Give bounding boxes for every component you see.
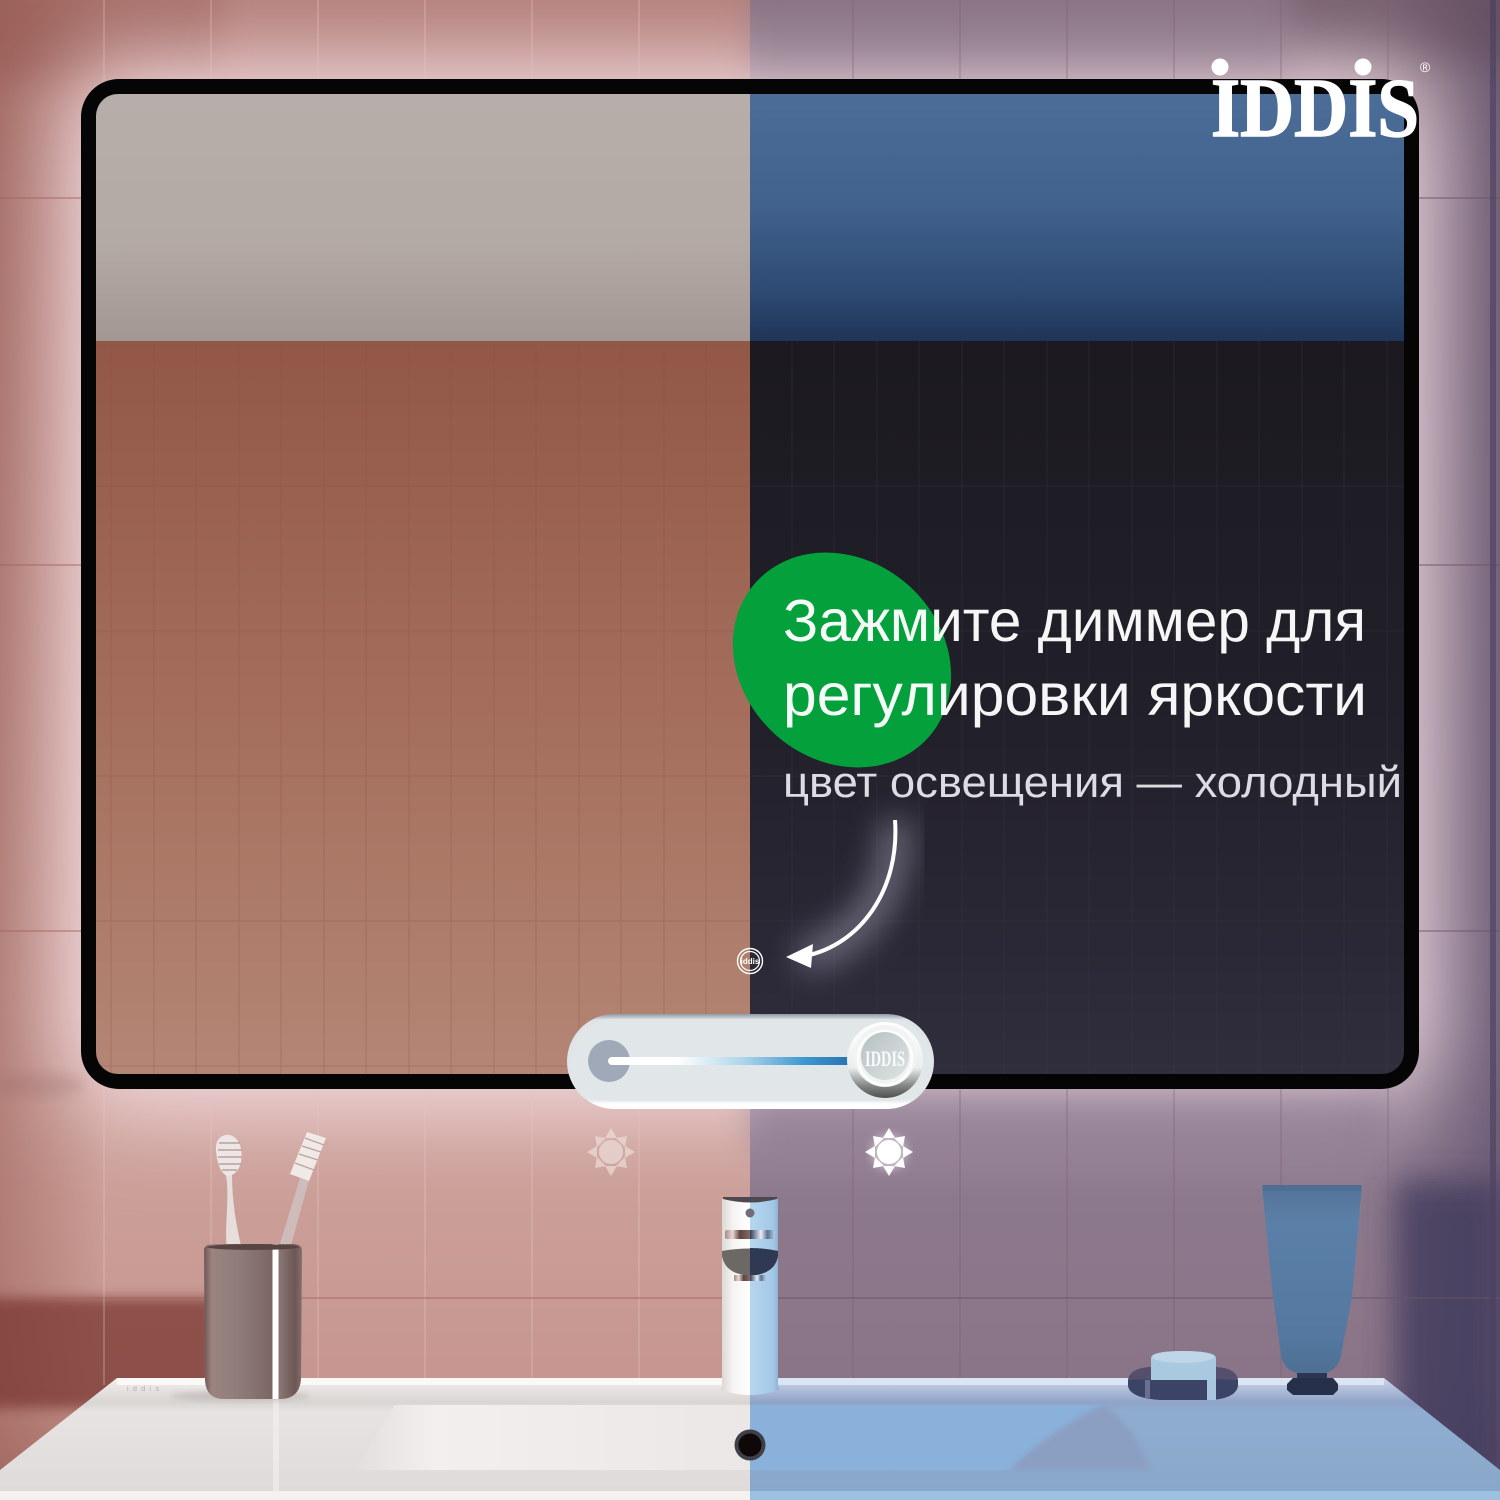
vanity counter and basin (0, 1378, 1500, 1500)
backsplash lip (117, 1378, 750, 1385)
arrow glow and arrow (786, 820, 895, 968)
lower chrome ring (734, 1275, 766, 1281)
logo: IDDIS: IDDIS (1211, 62, 1419, 155)
counter front edge (0, 1491, 750, 1500)
mirror reflection (96, 94, 1404, 1074)
lever screw (746, 1208, 754, 1218)
icon: dim sun (587, 1128, 635, 1176)
icon: bright sun (865, 1128, 913, 1176)
soap dish with soap (1128, 1351, 1238, 1400)
toothbrush right (279, 1132, 326, 1249)
basin left (354, 1405, 750, 1470)
basin right (740, 1405, 1150, 1470)
chrome ring (725, 1230, 775, 1239)
lever bowl (722, 1248, 778, 1276)
mirror (81, 79, 1419, 1089)
sink drain (734, 1430, 766, 1460)
reflection on counter (273, 1400, 279, 1491)
green blob accent (689, 508, 995, 812)
slider track (608, 1057, 853, 1065)
toothbrush cup (170, 1132, 326, 1401)
icon: mirror touch button: iddis (741, 957, 760, 966)
slider start dot (588, 1040, 630, 1082)
dimmer knob: IDDIS (865, 1046, 905, 1071)
toothbrush left (216, 1135, 242, 1250)
mirror frame (81, 79, 1419, 1089)
cup body (204, 1244, 302, 1399)
faucet top cap (723, 1197, 777, 1202)
cup shadow (170, 1391, 310, 1401)
dimmer knob (847, 1022, 923, 1098)
dish (1128, 1367, 1238, 1400)
counter right half (750, 1378, 1500, 1500)
faucet body (721, 1198, 779, 1395)
logo: IDDIS: ® (1420, 59, 1431, 75)
counter brand mark: iddis (127, 1386, 160, 1393)
icon: mirror touch button (738, 948, 762, 974)
heading: Зажмите диммер для (783, 588, 1366, 654)
mirror backlight glow (0, 0, 1434, 1150)
heading: регулировки яркости (783, 662, 1367, 728)
cream tube (1262, 1185, 1362, 1395)
soap (1151, 1351, 1216, 1380)
subheading: цвет освещения — холодный (783, 758, 1402, 807)
faucet (721, 1197, 779, 1395)
counter left half (0, 1378, 750, 1500)
dimmer slider panel (567, 1014, 934, 1109)
